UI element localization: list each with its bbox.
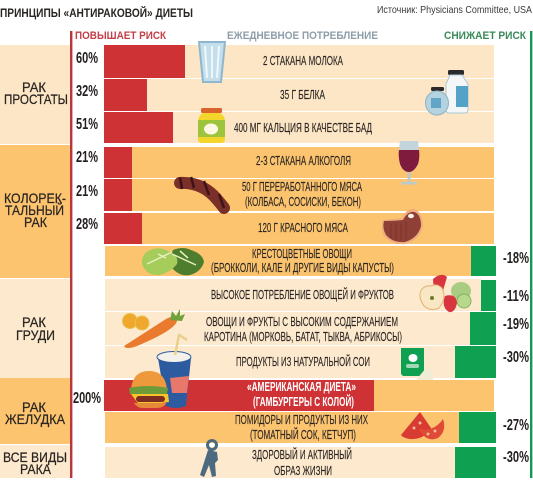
- panel: all cancers: РАКА: [20, 461, 52, 477]
- row: tomatoes: [105, 412, 529, 443]
- benefit axis line: [530, 31, 532, 478]
- icon: exercising person: [200, 440, 218, 477]
- icon: steak: [382, 209, 423, 244]
- row: healthy lifestyle: ЗДОРОВЫЙ И АКТИВНЫЙ: [252, 447, 352, 462]
- row: milk: 2 СТАКАНА МОЛОКА: [263, 53, 343, 68]
- row: american diet: «АМЕРИКАНСКАЯ ДИЕТА»: [247, 379, 356, 394]
- column heading: raises risk: ПОВЫШАЕТ РИСК: [75, 30, 166, 42]
- row: carotene: [105, 312, 529, 345]
- panel: colorectal cancer: [0, 145, 70, 278]
- row: alcohol: 2-3 СТАКАНА АЛКОГОЛЯ: [256, 153, 351, 168]
- row: vegetables and fruit: [105, 279, 529, 311]
- row: tomatoes: ПОМИДОРЫ И ПРОДУКТЫ ИЗ НИХ: [235, 412, 368, 427]
- row: cruciferous vegetables: [105, 246, 529, 276]
- row: american diet: (ГАМБУРГЕРЫ С КОЛОЙ): [253, 394, 354, 409]
- icon: brussels sprouts: [142, 248, 204, 275]
- panel: prostate cancer: ПРОСТАТЫ: [4, 91, 68, 107]
- row: carotene: ОВОЩИ И ФРУКТЫ С ВЫСОКИМ СОДЕРЖАНИЕМ: [206, 314, 398, 329]
- row: soy: [105, 346, 529, 378]
- icon: apple and cucumber: [420, 275, 471, 312]
- row: processed meat: [76, 179, 494, 211]
- icon: protein bottles: [426, 70, 468, 115]
- row: vegetables and fruit: ВЫСОКОЕ ПОТРЕБЛЕНИЕ ОВОЩЕЙ И ФРУКТОВ: [211, 287, 394, 302]
- panel: all cancers: [0, 445, 70, 478]
- row: processed meat: (КОЛБАСА, СОСИСКИ, БЕКОН): [245, 194, 361, 209]
- row: protein: 35 Г БЕЛКА: [280, 87, 325, 102]
- row: red meat: 120 Г КРАСНОГО МЯСА: [258, 220, 348, 235]
- row: calcium: [76, 112, 494, 143]
- row: healthy lifestyle: [105, 447, 529, 478]
- icon: supplement jar: [198, 108, 225, 143]
- row: processed meat: 50 Г ПЕРЕРАБОТАННОГО МЯСА: [242, 179, 362, 194]
- row: american diet: 200%: [73, 390, 101, 407]
- row: red meat: [76, 213, 494, 244]
- title: ПРИНЦИПЫ «АНТИРАКОВОЙ» ДИЕТЫ: [0, 5, 193, 20]
- panel: colorectal cancer: КОЛОРЕК-: [4, 190, 66, 206]
- row: milk: [76, 45, 494, 78]
- icon: burger and cola: [129, 335, 191, 408]
- icon: soy pack: [401, 348, 433, 380]
- panel: colorectal cancer: РАК: [24, 214, 48, 230]
- icon: glass of milk: [199, 42, 225, 82]
- panel: all cancers: ВСЕ ВИДЫ: [3, 449, 67, 465]
- panel: breast cancer: РАК: [22, 314, 47, 330]
- row: calcium: 400 МГ КАЛЬЦИЯ В КАЧЕСТВЕ БАД: [234, 120, 372, 135]
- panel: stomach cancer: ЖЕЛУДКА: [5, 411, 66, 427]
- panel: breast cancer: ГРУДИ: [16, 327, 55, 343]
- row: protein: [76, 79, 494, 111]
- panel: breast cancer: [0, 279, 70, 378]
- column heading: daily consumption: ЕЖЕДНЕВНОЕ ПОТРЕБЛЕНИЕ: [227, 30, 378, 42]
- row: calcium: 51%: [76, 116, 98, 133]
- column heading: lowers risk: СНИЖАЕТ РИСК: [444, 30, 526, 42]
- row: american diet: [73, 379, 494, 411]
- risk axis line: [70, 31, 72, 478]
- row: alcohol: [76, 147, 494, 178]
- row: healthy lifestyle: ОБРАЗ ЖИЗНИ: [274, 463, 332, 478]
- panel: stomach cancer: РАК: [22, 399, 47, 415]
- icon: wine glass: [399, 141, 419, 184]
- panel: colorectal cancer: ТАЛЬНЫЙ: [5, 201, 64, 218]
- row: alcohol: 21%: [76, 149, 98, 166]
- icon: carrot: [122, 309, 185, 348]
- row: milk: 60%: [76, 50, 98, 67]
- row: tomatoes: (ТОМАТНЫЙ СОК, КЕТЧУП): [250, 427, 356, 442]
- row: cruciferous vegetables: (БРОККОЛИ, КАЛЕ И ДРУГИЕ ВИДЫ КАПУСТЫ): [211, 260, 394, 275]
- row: red meat: 28%: [76, 216, 98, 233]
- panel: prostate cancer: РАК: [22, 79, 47, 95]
- row: protein: 32%: [76, 83, 98, 100]
- icon: tomato slices: [401, 412, 444, 439]
- row: processed meat: 21%: [76, 183, 98, 200]
- panel: prostate cancer: [0, 45, 70, 144]
- row: carotene: КАРОТИНА (МОРКОВЬ, БАТАТ, ТЫКВА, АБРИКОСЫ): [204, 329, 402, 344]
- icon: sausage: [180, 177, 224, 208]
- row: soy: ПРОДУКТЫ ИЗ НАТУРАЛЬНОЙ СОИ: [236, 354, 370, 369]
- panel: stomach cancer: [0, 378, 70, 444]
- row: cruciferous vegetables: КРЕСТОЦВЕТНЫЕ ОВОЩИ: [252, 246, 352, 261]
